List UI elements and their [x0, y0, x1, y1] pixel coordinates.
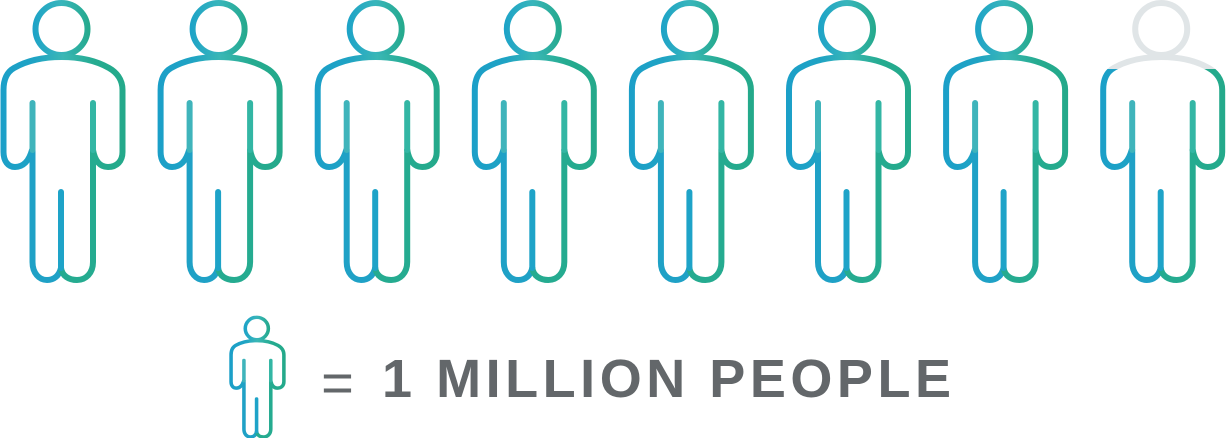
person 2 — [161, 3, 280, 280]
person 7 — [946, 3, 1065, 280]
person 3 — [318, 3, 437, 280]
person 6 — [789, 3, 908, 280]
person 4 — [475, 3, 594, 280]
equals sign: = — [321, 351, 354, 414]
legend icon: one person — [231, 317, 284, 437]
person 8: partially filled, grey top — [1103, 3, 1222, 280]
person 5 — [632, 3, 751, 280]
person 1 — [4, 3, 122, 280]
legend label: 1 MILLION PEOPLE — [382, 349, 951, 409]
